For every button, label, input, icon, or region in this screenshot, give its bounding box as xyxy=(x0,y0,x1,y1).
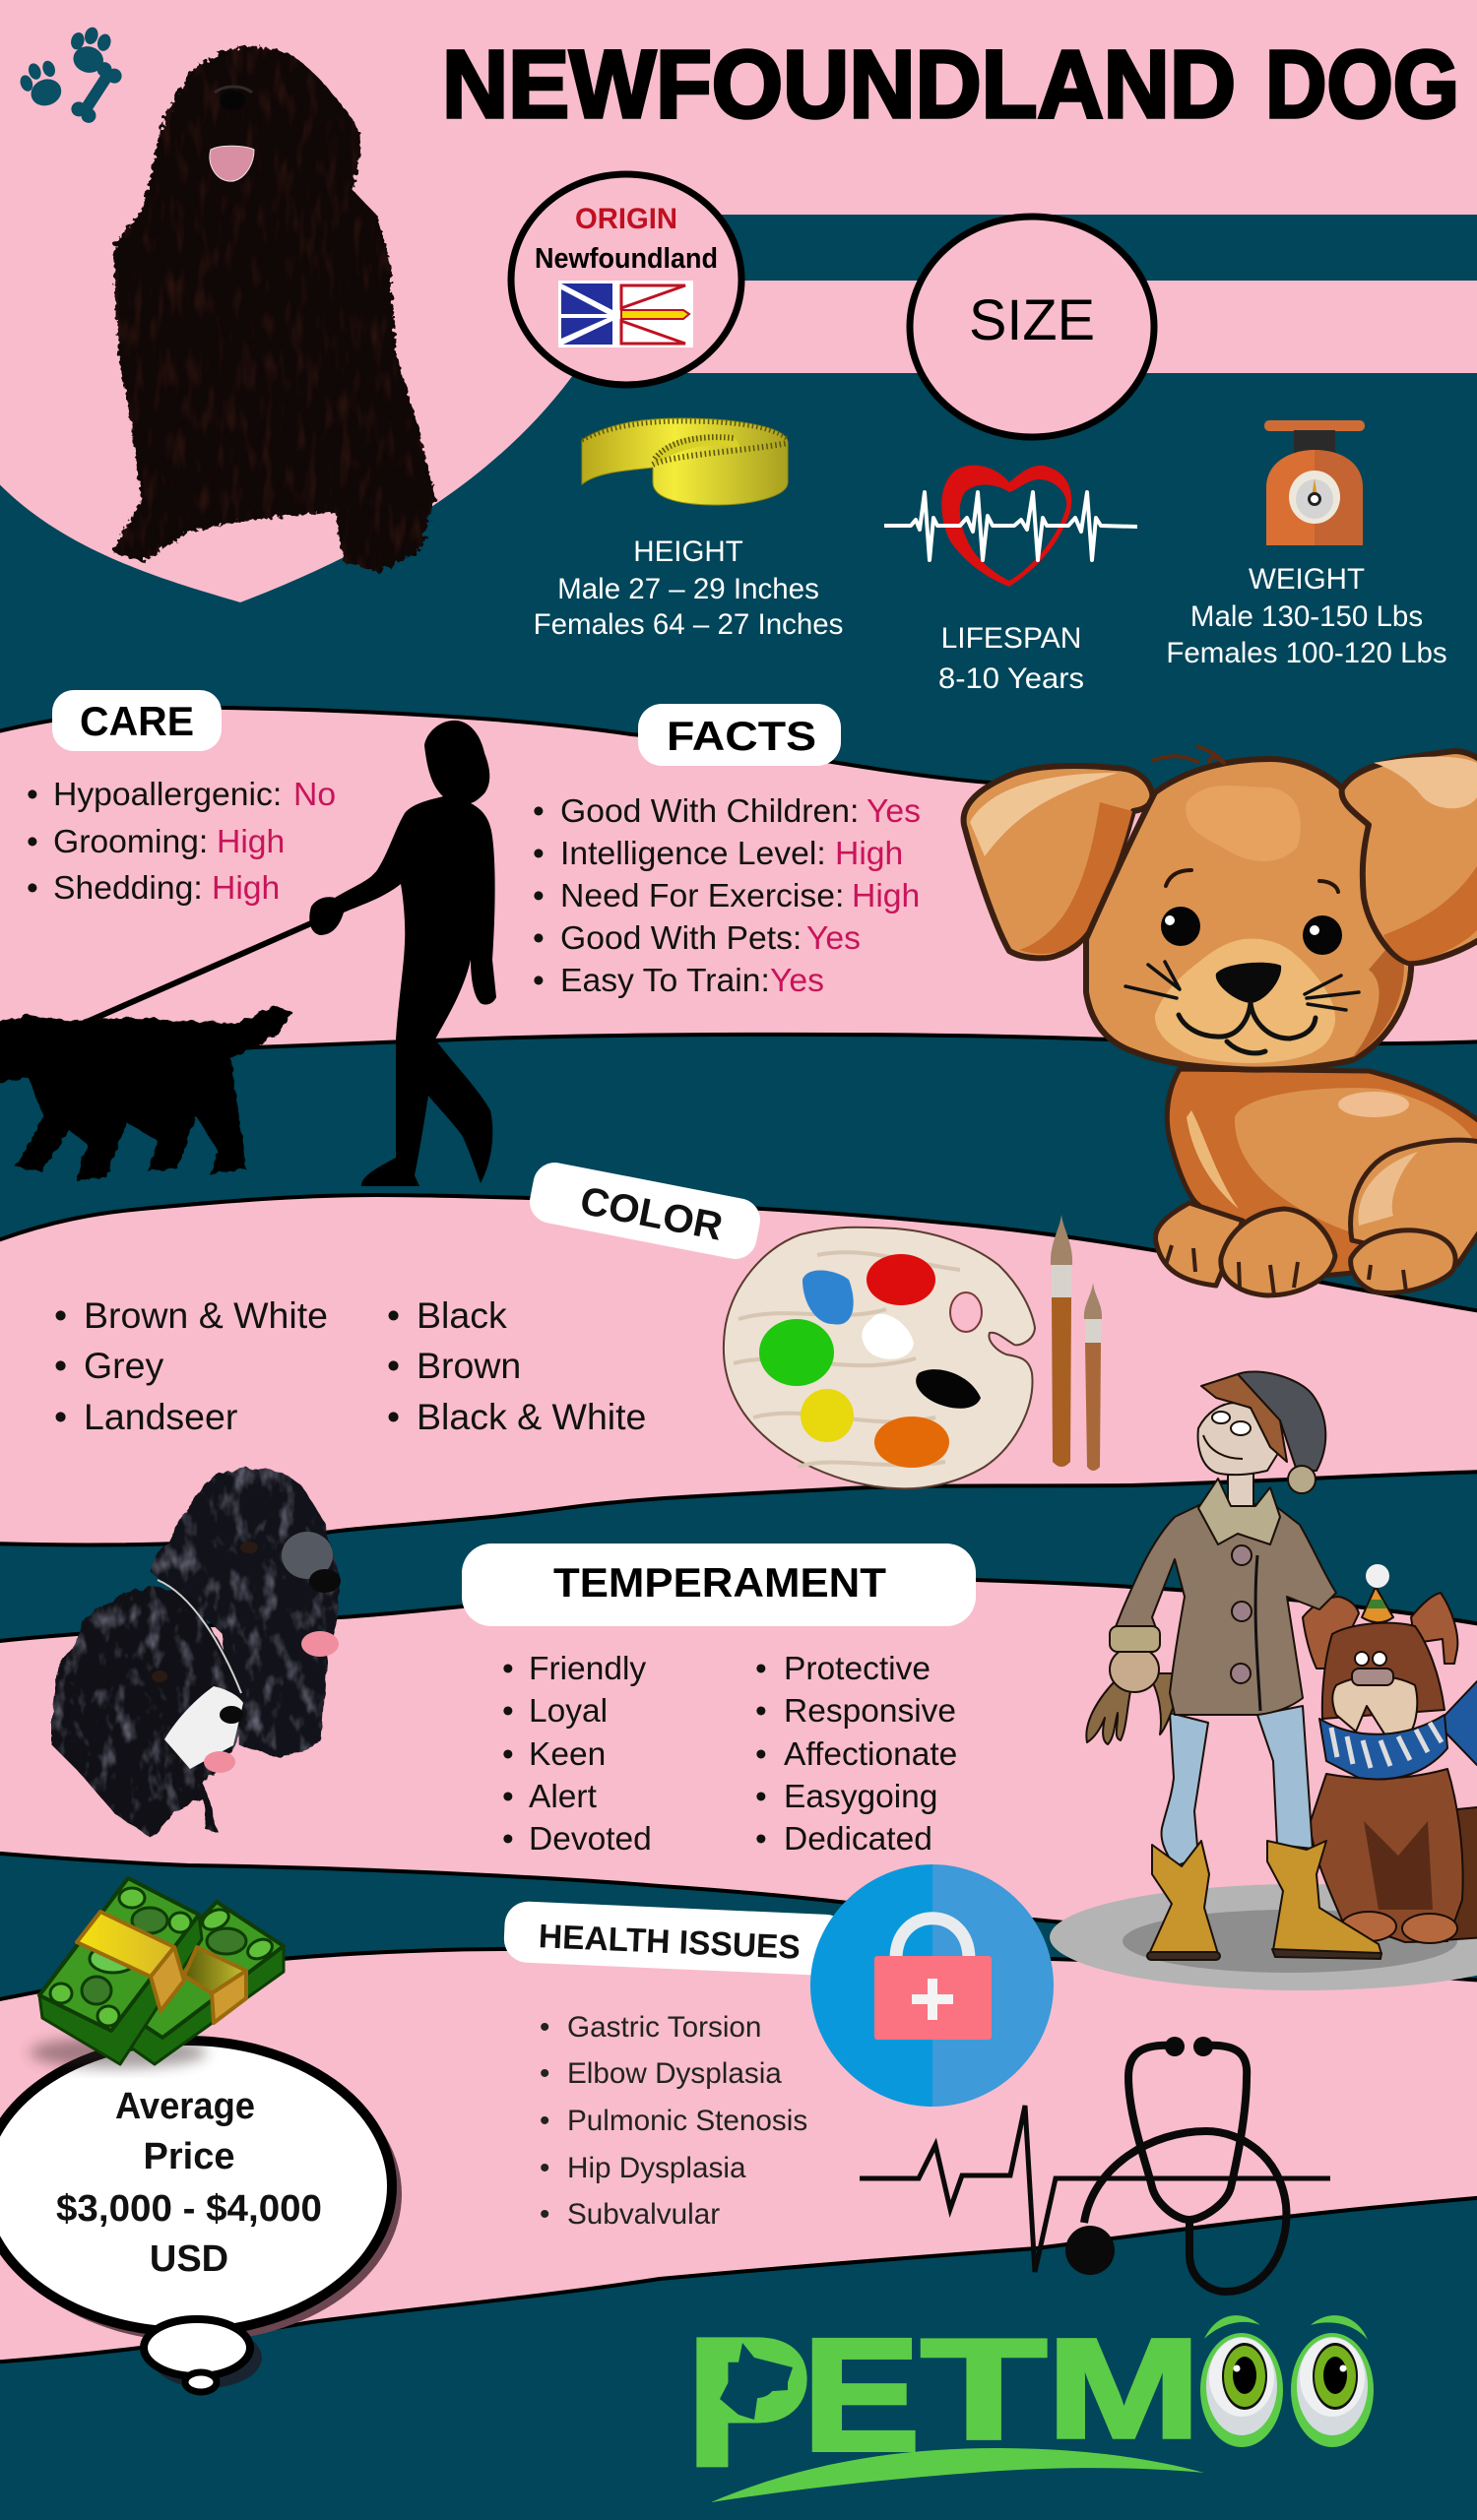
temperament column two xyxy=(755,1651,957,1858)
left ear xyxy=(1303,1597,1359,1669)
fact item: Good With Pets: xyxy=(560,919,802,957)
left brow xyxy=(1204,2315,1260,2339)
fact item: Yes xyxy=(770,962,824,999)
color item: Brown xyxy=(417,1345,521,1386)
origin badge xyxy=(511,174,741,385)
puppy body xyxy=(1167,1069,1477,1280)
eye xyxy=(1373,1652,1386,1666)
health item: Hip Dysplasia xyxy=(567,2152,746,2184)
wave: color xyxy=(0,1195,1477,1544)
icon: paws and bone xyxy=(15,23,124,126)
hair tuft xyxy=(1152,746,1224,763)
icon: upper paw xyxy=(64,23,113,77)
fact item: Good With Children: xyxy=(560,792,859,830)
color item: • xyxy=(54,1294,67,1336)
right bill ovals xyxy=(200,1906,231,1933)
care item: • xyxy=(27,823,38,860)
fact item: Yes xyxy=(806,919,861,957)
whiskers xyxy=(1125,962,1359,1010)
front paws xyxy=(1341,1912,1396,1941)
size band xyxy=(626,281,1477,373)
temperament heading xyxy=(462,1544,976,1626)
care list xyxy=(27,776,336,907)
fact item: • xyxy=(533,962,545,999)
back dog xyxy=(151,1467,340,1759)
thumb hole xyxy=(950,1292,982,1332)
bubble body xyxy=(0,2041,392,2332)
icon: lower paw xyxy=(15,57,66,112)
right stack top xyxy=(118,1902,284,2038)
icon: money stacks xyxy=(30,1878,284,2068)
title second word: DOG xyxy=(1265,31,1459,138)
blue paint xyxy=(803,1271,854,1325)
dog body xyxy=(1310,1769,1463,1942)
health issues heading: HEALTH ISSUES xyxy=(538,1918,802,1967)
front dog tongue xyxy=(204,1751,235,1773)
head shade xyxy=(1352,935,1404,1058)
male height: Male 27 – 29 Inches xyxy=(557,573,819,605)
head xyxy=(1322,1623,1445,1719)
silhouette: woman walking dog xyxy=(0,721,496,1186)
temperament item: • xyxy=(755,1736,767,1773)
left bill ovals xyxy=(97,2006,119,2026)
left band top xyxy=(77,1912,174,1977)
bubble tail xyxy=(144,2319,250,2376)
left stack top xyxy=(39,1878,199,2031)
hind leg xyxy=(1351,1140,1477,1265)
icon: tape measure xyxy=(582,418,788,505)
temperament item: • xyxy=(755,1693,767,1730)
health item: Elbow Dysplasia xyxy=(567,2057,782,2090)
price line: Price xyxy=(144,2136,234,2177)
title xyxy=(442,31,1459,138)
letter E: E xyxy=(803,2305,920,2485)
icon: heart with pulse xyxy=(884,466,1137,587)
fur collar xyxy=(1198,1479,1280,1544)
left stack sides xyxy=(39,1915,202,2064)
scarf xyxy=(1319,1715,1447,1780)
temperament item: Keen xyxy=(529,1736,606,1773)
right brow xyxy=(1311,2315,1368,2340)
body light patch xyxy=(1235,1088,1477,1232)
back dog tongue xyxy=(301,1631,339,1657)
price line: $3,000 - $4,000 xyxy=(56,2188,322,2230)
price line: Average xyxy=(115,2086,255,2127)
beard xyxy=(1332,1676,1417,1735)
temperament item: • xyxy=(502,1736,514,1773)
icon: short brush xyxy=(1084,1283,1102,1471)
fact item: • xyxy=(533,835,545,872)
right boot xyxy=(1267,1841,1381,1954)
white paint xyxy=(862,1314,914,1359)
color item: Grey xyxy=(84,1345,164,1386)
female weight: Females 100-120 Lbs xyxy=(1166,637,1447,669)
right ear xyxy=(1342,751,1477,963)
care item: Shedding: xyxy=(53,869,203,907)
icon: bone xyxy=(69,59,124,126)
size badge xyxy=(910,217,1154,437)
fact item: Need For Exercise: xyxy=(560,877,844,914)
brows xyxy=(1166,870,1338,892)
health item: • xyxy=(540,2152,549,2184)
size label: SIZE xyxy=(969,288,1095,352)
left bill ovals xyxy=(119,1888,145,1908)
leash xyxy=(85,923,311,1023)
origin label: ORIGIN xyxy=(575,203,677,235)
left eye glint xyxy=(1165,915,1175,925)
facts list xyxy=(533,792,921,999)
black paint xyxy=(916,1369,981,1409)
temperament item: Friendly xyxy=(529,1651,646,1687)
red paint xyxy=(867,1254,935,1305)
price thought bubble xyxy=(0,2041,402,2392)
color heading: COLOR xyxy=(577,1179,726,1249)
icon: weighing scale xyxy=(1264,420,1365,545)
left boot sole xyxy=(1147,1952,1220,1960)
chest piece xyxy=(1065,2226,1115,2275)
letter M: M xyxy=(1047,2309,1201,2468)
icon: long brush xyxy=(1051,1215,1072,1467)
temperament item: Protective xyxy=(784,1651,931,1687)
color item: Black & White xyxy=(417,1396,646,1437)
left band side xyxy=(151,1947,184,2011)
fact item: Intelligence Level: xyxy=(560,835,826,872)
health list xyxy=(540,2011,807,2231)
left eye xyxy=(1161,907,1200,946)
left boot xyxy=(1149,1841,1218,1954)
back highlight xyxy=(1338,1092,1409,1117)
temperament item: • xyxy=(502,1651,514,1687)
bubble shadow xyxy=(0,2047,402,2342)
kit body xyxy=(874,1956,992,2040)
hat xyxy=(1238,1371,1325,1471)
neck xyxy=(1228,1472,1253,1516)
left jeans xyxy=(1162,1713,1208,1866)
coat buttons xyxy=(1232,1545,1252,1565)
hat pompom xyxy=(1288,1466,1316,1493)
nose xyxy=(1216,963,1281,1003)
wave: care and facts xyxy=(0,708,1477,1075)
letter T: T xyxy=(921,2310,1047,2469)
color item: • xyxy=(387,1345,400,1386)
health issues heading xyxy=(503,1901,850,1977)
face xyxy=(1198,1403,1280,1475)
height heading: HEIGHT xyxy=(633,536,743,568)
cuff xyxy=(1110,1626,1160,1652)
temperament item: • xyxy=(502,1779,514,1815)
weight heading: WEIGHT xyxy=(1249,563,1365,596)
coat buttons xyxy=(1231,1664,1251,1683)
back dog eye xyxy=(240,1542,258,1553)
tongue xyxy=(210,146,254,181)
nose xyxy=(1352,1669,1393,1685)
care heading xyxy=(52,690,222,751)
back dog nose xyxy=(309,1569,341,1593)
dog head cutout xyxy=(720,2343,793,2420)
front dog xyxy=(52,1585,243,1838)
mouth xyxy=(1179,1003,1316,1053)
care item: Grooming: xyxy=(53,823,208,860)
tubes xyxy=(1084,2046,1286,2292)
price text xyxy=(56,2086,322,2280)
temperament item: Responsive xyxy=(784,1693,956,1730)
right paw xyxy=(1351,1230,1455,1292)
origin value: Newfoundland xyxy=(535,243,718,275)
fact item: • xyxy=(533,877,545,914)
fact item: Yes xyxy=(867,792,921,830)
left ear xyxy=(964,766,1152,958)
icon: medical kit circle xyxy=(810,1864,1054,2107)
chest markings xyxy=(1364,1821,1433,1910)
left eye xyxy=(1200,2333,1283,2447)
forehead patch xyxy=(1186,786,1301,861)
temperament item: • xyxy=(502,1821,514,1858)
color item: Landseer xyxy=(84,1396,237,1437)
bubble small xyxy=(185,2372,217,2392)
weight text xyxy=(1166,563,1447,669)
dog haunch xyxy=(1428,1806,1477,1941)
health item: • xyxy=(540,2011,549,2044)
color item: • xyxy=(54,1345,67,1386)
right stack sides xyxy=(131,1946,284,2064)
right eye glint xyxy=(1310,925,1319,935)
left bill centre xyxy=(90,1945,137,1973)
hat stripe xyxy=(1367,1600,1386,1608)
wave: health xyxy=(0,1947,1477,2362)
coat seam xyxy=(1255,1555,1260,1711)
temperament item: • xyxy=(755,1779,767,1815)
eye xyxy=(1231,1421,1251,1435)
left bill ovals xyxy=(169,1913,191,1932)
icon: paint palette xyxy=(724,1228,1035,1488)
woman xyxy=(309,721,496,1186)
puppy head xyxy=(1086,759,1411,1070)
price line: USD xyxy=(150,2238,228,2280)
coat buttons xyxy=(1232,1602,1252,1621)
hind leg light xyxy=(1358,1152,1418,1226)
chest highlight xyxy=(1187,1110,1239,1209)
front dog nose xyxy=(220,1706,243,1724)
hair xyxy=(1201,1374,1287,1462)
smile xyxy=(1203,1435,1243,1459)
origin circle xyxy=(511,174,741,385)
front dog white muzzle xyxy=(164,1686,243,1769)
nose xyxy=(220,91,245,110)
right eye xyxy=(1291,2333,1374,2447)
earpiece xyxy=(1193,2037,1213,2056)
health item: • xyxy=(540,2105,549,2137)
health item: Pulmonic Stenosis xyxy=(567,2105,807,2137)
two black newfoundland dogs xyxy=(52,1467,341,1838)
right jeans xyxy=(1257,1706,1313,1849)
temperament item: Dedicated xyxy=(784,1821,932,1858)
facts heading xyxy=(638,704,841,766)
left bill ovals xyxy=(50,1984,72,2003)
front dog eye xyxy=(152,1670,167,1682)
orange paint xyxy=(874,1417,949,1468)
kit handle xyxy=(896,1919,969,1959)
temperament item: Easygoing xyxy=(784,1779,937,1815)
health item: • xyxy=(540,2057,549,2090)
dog body xyxy=(113,47,435,572)
fact item: High xyxy=(852,877,920,914)
fact item: High xyxy=(835,835,903,872)
cartoon brown dog xyxy=(1303,1564,1477,1943)
temperament item: Loyal xyxy=(529,1693,608,1730)
facts heading: FACTS xyxy=(667,713,816,759)
size circle xyxy=(910,217,1154,437)
care item: High xyxy=(217,823,285,860)
scarf stripes xyxy=(1331,1723,1442,1768)
care item: No xyxy=(293,776,336,813)
fact item: Easy To Train: xyxy=(560,962,770,999)
left ear light xyxy=(970,773,1118,856)
logo: PETMOO xyxy=(686,2300,1374,2503)
left bill ovals xyxy=(132,1908,167,1933)
swoosh xyxy=(711,2448,1204,2502)
circle right half xyxy=(932,1864,1054,2107)
right boot sole xyxy=(1272,1949,1381,1959)
fact item: • xyxy=(533,792,545,830)
color item: Brown & White xyxy=(84,1294,328,1336)
color heading xyxy=(526,1159,764,1263)
left ear shade xyxy=(1019,802,1132,954)
temperament item: • xyxy=(755,1651,767,1687)
temperament column one xyxy=(502,1651,652,1858)
right ear xyxy=(1411,1593,1457,1664)
middle paw xyxy=(1221,1209,1335,1295)
care heading: CARE xyxy=(80,698,194,744)
temperament item: Devoted xyxy=(529,1821,652,1858)
right band top xyxy=(184,1947,246,1993)
health item: Subvalvular xyxy=(567,2198,720,2231)
care item: • xyxy=(27,869,38,907)
pulse line xyxy=(860,2106,1330,2272)
circle left half xyxy=(810,1864,932,2107)
front paws xyxy=(1402,1914,1457,1943)
neck ruff line xyxy=(158,1580,241,1693)
color item: Black xyxy=(417,1294,507,1336)
care item: • xyxy=(27,776,38,813)
money shadow xyxy=(30,2037,207,2068)
temperament list xyxy=(502,1651,957,1858)
party hat xyxy=(1362,1587,1393,1622)
right bill ovals xyxy=(207,1928,246,1954)
big black dog photo xyxy=(113,47,435,572)
dog xyxy=(0,1006,292,1181)
lifespan heading: LIFESPAN xyxy=(941,622,1081,655)
color item: • xyxy=(387,1396,400,1437)
pulse line xyxy=(884,492,1137,560)
lifespan years: 8-10 Years xyxy=(938,662,1084,695)
care item: Hypoallergenic: xyxy=(53,776,282,813)
health item: • xyxy=(540,2198,549,2231)
back dog muzzle xyxy=(282,1532,333,1579)
letter P: P xyxy=(686,2300,811,2503)
icon: Newfoundland flag xyxy=(558,281,693,347)
coat xyxy=(1111,1504,1336,1715)
toes xyxy=(1166,1245,1406,1295)
temperament item: • xyxy=(755,1821,767,1858)
color item: • xyxy=(54,1396,67,1437)
female height: Females 64 – 27 Inches xyxy=(534,608,843,641)
hat pompom xyxy=(1366,1564,1389,1588)
cartoon puppy xyxy=(964,746,1477,1295)
right bill ovals xyxy=(244,1935,276,1963)
right ear shade xyxy=(1383,866,1477,961)
yellow paint xyxy=(801,1389,854,1442)
right eye xyxy=(1303,915,1342,955)
mitten hand xyxy=(1110,1647,1159,1692)
cartoon boy xyxy=(1086,1371,1381,1960)
color column two xyxy=(387,1294,646,1437)
marble veins xyxy=(734,1252,960,1467)
muzzle xyxy=(1155,939,1335,1063)
wave: temperament xyxy=(0,1578,1477,1974)
gloves xyxy=(1086,1673,1182,1744)
eye xyxy=(1212,1412,1230,1423)
fact item: • xyxy=(533,919,545,957)
left paw xyxy=(1155,1203,1243,1286)
color item: • xyxy=(387,1294,400,1336)
temperament item: Affectionate xyxy=(784,1736,957,1773)
eye xyxy=(1355,1652,1369,1666)
scarf tails xyxy=(1443,1681,1477,1765)
heart xyxy=(941,466,1071,587)
muzzle highlight xyxy=(215,87,252,93)
icon: stethoscope and pulse xyxy=(860,2037,1330,2292)
color column one xyxy=(54,1294,328,1437)
kit cross xyxy=(912,1979,953,2020)
ground ellipse xyxy=(1050,1884,1477,1990)
care item: High xyxy=(212,869,280,907)
letters xyxy=(686,2300,1201,2503)
title first word: NEWFOUNDLAND xyxy=(442,31,1236,138)
green paint xyxy=(759,1319,834,1386)
temperament item: • xyxy=(502,1693,514,1730)
right band side xyxy=(212,1971,246,2023)
health item: Gastric Torsion xyxy=(567,2011,761,2044)
color list xyxy=(54,1294,646,1437)
palette board xyxy=(724,1228,1035,1488)
height text xyxy=(534,536,843,641)
right ear light xyxy=(1374,757,1477,808)
male weight: Male 130-150 Lbs xyxy=(1190,600,1423,633)
bubble tail shadow xyxy=(152,2327,262,2388)
earpiece xyxy=(1165,2037,1185,2056)
left bill ovals xyxy=(82,1977,111,2004)
temperament heading: TEMPERAMENT xyxy=(553,1559,886,1606)
lifespan text xyxy=(938,622,1084,695)
temperament item: Alert xyxy=(529,1779,598,1815)
